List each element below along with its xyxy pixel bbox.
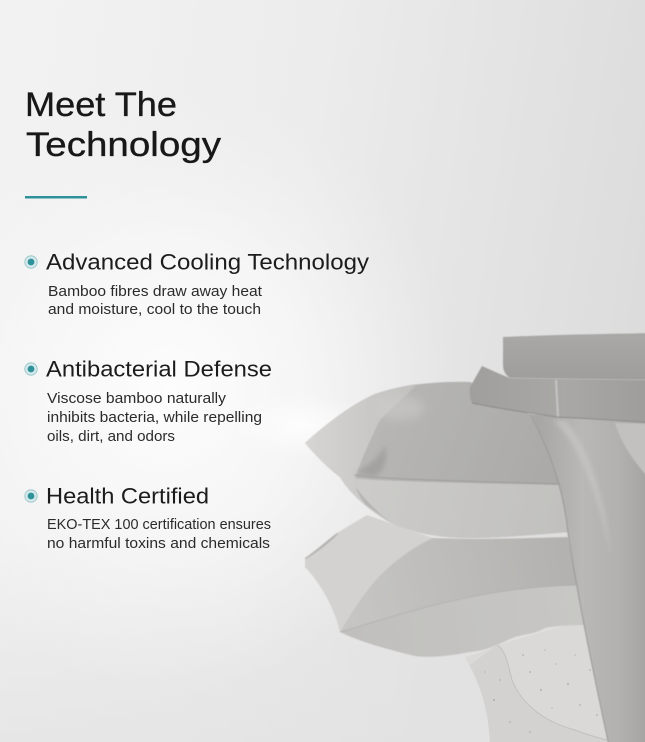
title: Meet The bbox=[25, 86, 177, 124]
description: EKO-TEX 100 certification ensures bbox=[47, 517, 271, 533]
icon: bullet bbox=[25, 256, 37, 268]
inner fold shadow bbox=[356, 445, 386, 477]
left flap bbox=[305, 384, 417, 525]
title bbox=[25, 86, 221, 164]
description: Bamboo fibres draw away heat bbox=[48, 284, 262, 300]
heading: Advanced Cooling Technology bbox=[46, 250, 370, 274]
sheet highlight bbox=[553, 420, 612, 560]
back flap bbox=[305, 515, 433, 632]
illustration: pillows and sheets bbox=[305, 333, 645, 742]
lower face bbox=[340, 585, 586, 657]
feature: health certified bbox=[25, 484, 271, 552]
title: Technology bbox=[26, 126, 221, 164]
soft pillow highlight bbox=[376, 396, 424, 420]
description: no harmful toxins and chemicals bbox=[47, 536, 270, 552]
feature: antibacterial defense bbox=[25, 356, 272, 445]
feature: advanced cooling bbox=[25, 250, 370, 318]
folded sheet lower bbox=[470, 366, 645, 423]
accent rule bbox=[25, 196, 87, 198]
draped sheet bbox=[530, 414, 645, 742]
heading: Health Certified bbox=[46, 484, 209, 508]
folded sheet upper bbox=[503, 333, 645, 380]
stone stool bbox=[465, 620, 625, 742]
bottom pillow bbox=[305, 515, 586, 657]
icon: bullet bbox=[25, 490, 37, 502]
description: inhibits bacteria, while repelling bbox=[47, 410, 262, 426]
heading: Antibacterial Defense bbox=[46, 356, 272, 382]
icon: bullet bbox=[25, 363, 37, 375]
description bbox=[48, 284, 262, 318]
description bbox=[47, 391, 262, 445]
description: oils, dirt, and odors bbox=[47, 429, 175, 445]
description: and moisture, cool to the touch bbox=[48, 302, 261, 318]
top pillow bbox=[305, 382, 569, 538]
lower face bbox=[350, 478, 569, 538]
description: Viscose bamboo naturally bbox=[47, 391, 227, 407]
pillow body bbox=[305, 382, 569, 538]
upper face bbox=[340, 537, 578, 632]
description bbox=[47, 517, 271, 552]
